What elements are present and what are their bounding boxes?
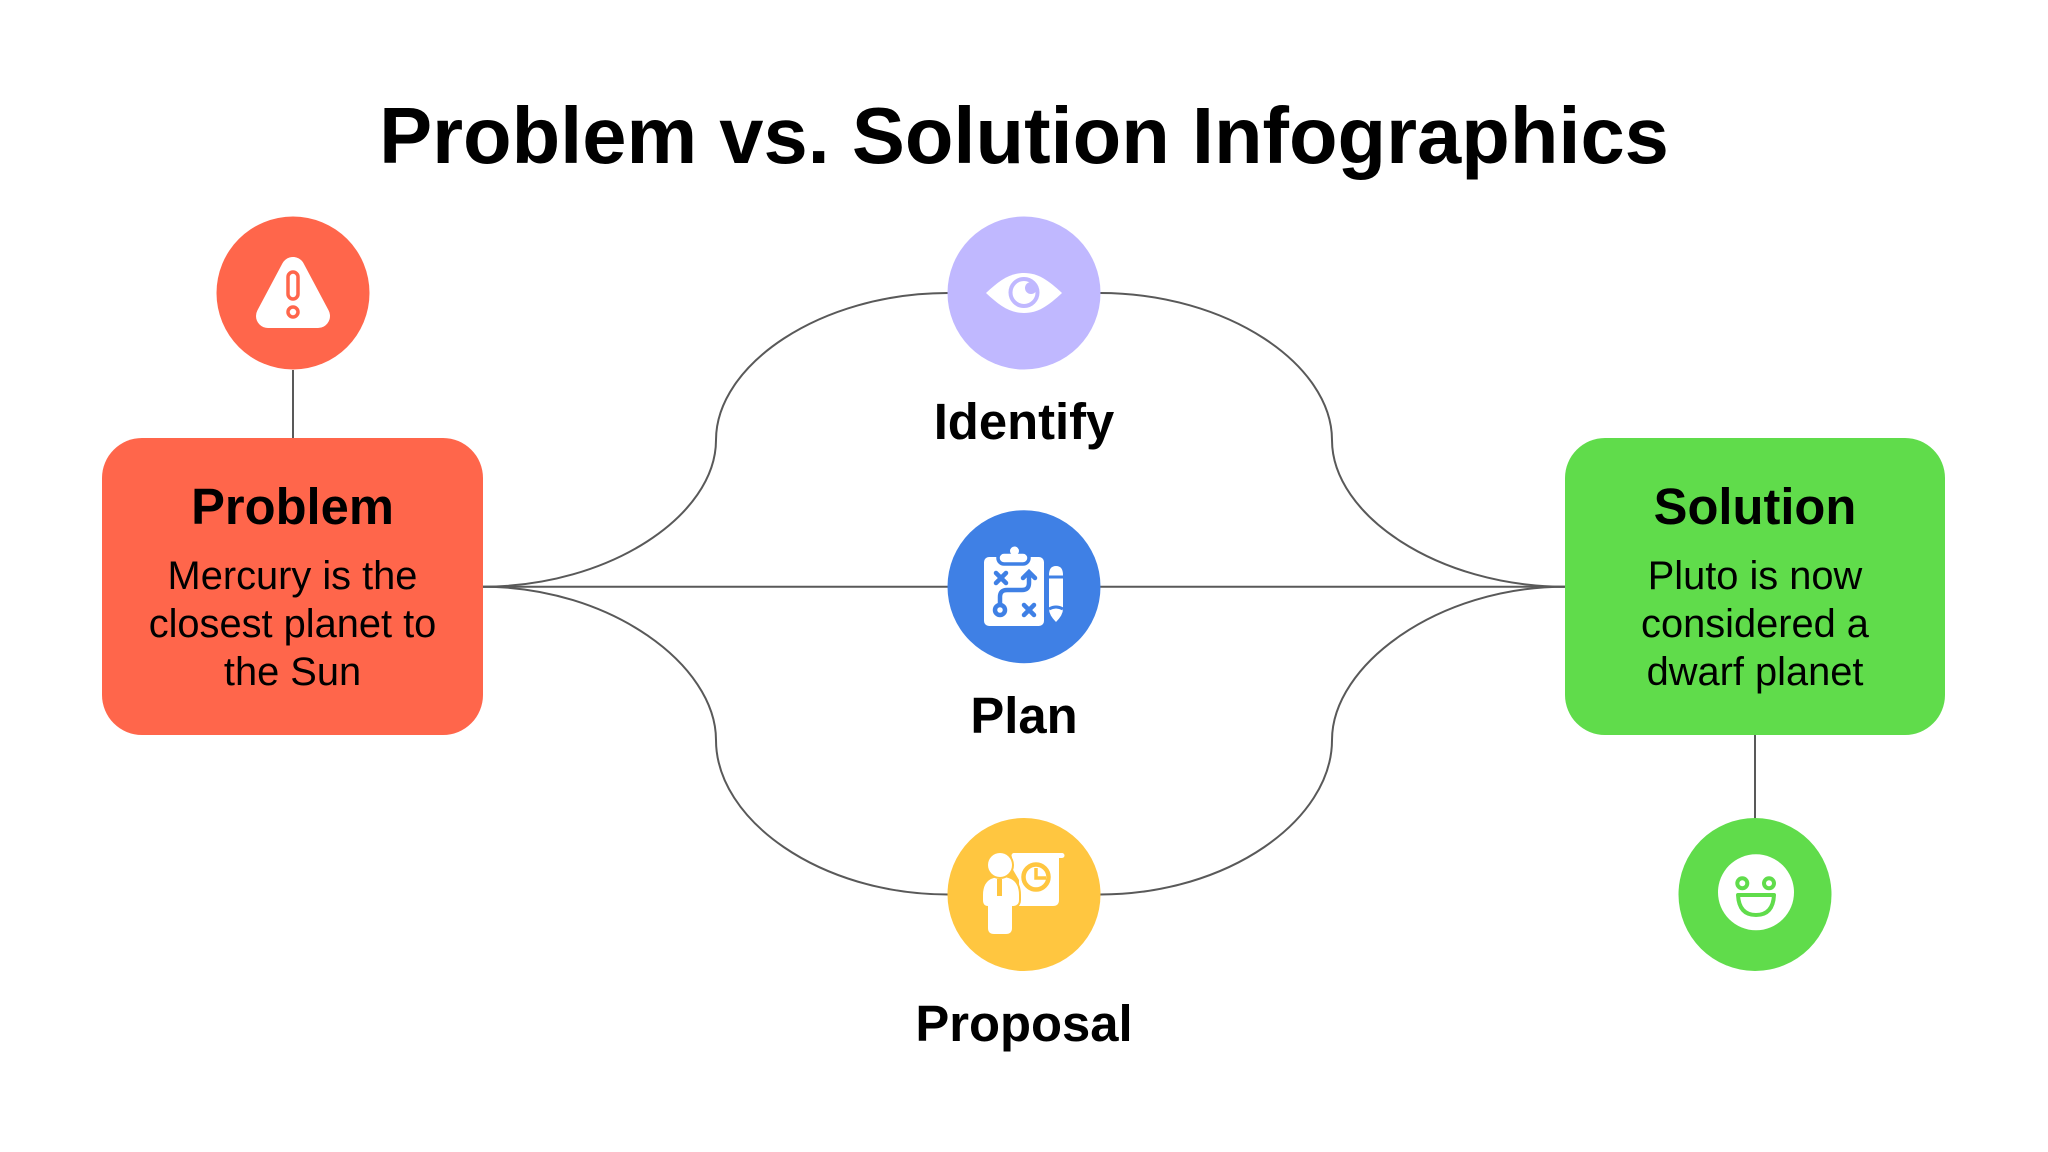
- icon: plan clipboard: [948, 510, 1100, 663]
- icon: presenter: [948, 818, 1100, 971]
- problem text: the Sun: [224, 650, 361, 694]
- solution text: Pluto is now: [1648, 554, 1862, 598]
- solution text: [1641, 554, 1869, 694]
- label: proposal: Proposal: [915, 995, 1133, 1052]
- solution heading: Solution: [1654, 478, 1856, 535]
- label: identify: Identify: [934, 393, 1114, 450]
- panel: solution: [1565, 438, 1945, 735]
- problem text: Mercury is the: [168, 554, 417, 598]
- solution text: considered a: [1641, 602, 1869, 646]
- connector lines: [293, 293, 1755, 894]
- solution text: dwarf planet: [1647, 650, 1863, 694]
- problem heading: Problem: [191, 478, 394, 535]
- problem text: [149, 554, 436, 694]
- icon: eye: [948, 216, 1100, 370]
- problem text: closest planet to: [149, 602, 436, 646]
- icon: warning triangle: [216, 216, 370, 370]
- panel: problem: [102, 438, 483, 735]
- title: Problem vs. Solution Infographics: [379, 91, 1669, 180]
- icon: smile: [1678, 818, 1832, 971]
- label: plan: Plan: [970, 687, 1078, 744]
